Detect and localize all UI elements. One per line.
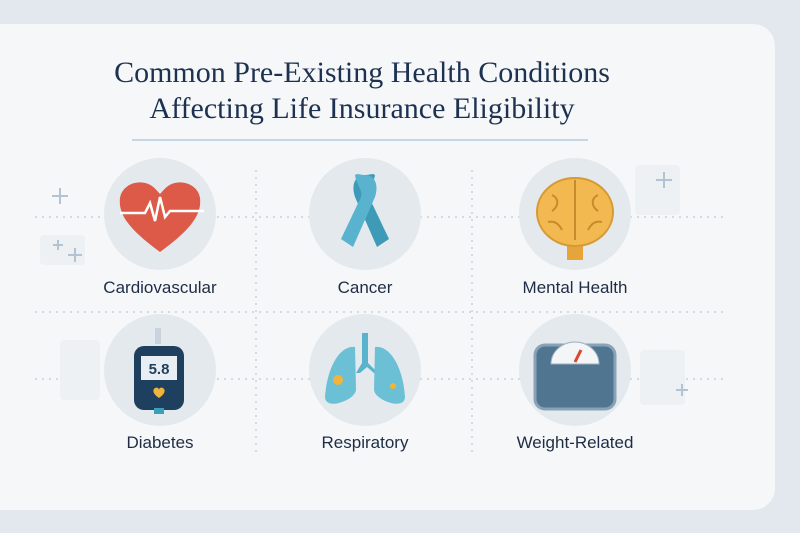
- label: Diabetes: Diabetes: [126, 433, 194, 452]
- icon: glucose meter: 5.8: [149, 361, 169, 378]
- label: Cardiovascular: Cardiovascular: [103, 278, 217, 297]
- title underline: [132, 139, 588, 141]
- title: Common Pre-Existing Health Conditions: [114, 56, 610, 89]
- label: Cancer: Cancer: [338, 278, 392, 297]
- label: Weight-Related: Weight-Related: [517, 433, 633, 452]
- label: Respiratory: Respiratory: [322, 433, 408, 452]
- label: Mental Health: Mental Health: [523, 278, 627, 297]
- title: [114, 56, 610, 125]
- title: Affecting Life Insurance Eligibility: [149, 92, 575, 125]
